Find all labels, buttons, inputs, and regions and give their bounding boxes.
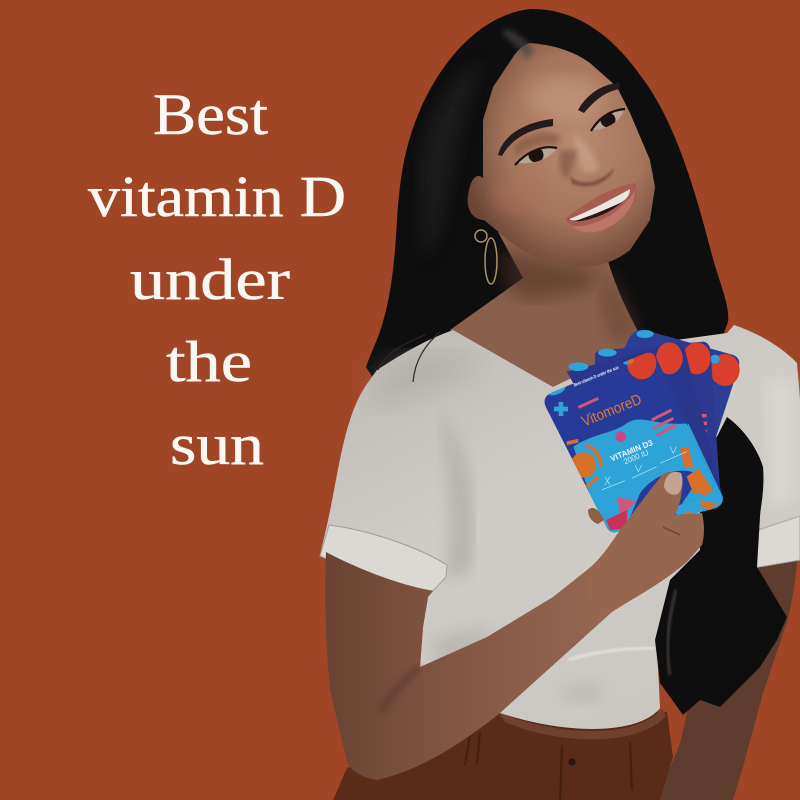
waist skin strip bbox=[498, 708, 666, 739]
hair lock sheen bbox=[668, 590, 676, 675]
heading: Best vitamin D under the sun: under bbox=[130, 247, 290, 312]
long hair lock on the right bbox=[655, 417, 787, 715]
packet tagline: Best vitamin D under the sun bbox=[573, 365, 620, 388]
packet cross icon bbox=[554, 402, 568, 416]
packet red circle bbox=[627, 352, 656, 380]
neck shadow bbox=[500, 250, 600, 300]
neck and chest bbox=[450, 232, 655, 390]
elbow crease shadow bbox=[380, 667, 420, 712]
packet product name: VITAMIN D3 bbox=[609, 437, 654, 464]
back packet 4 bbox=[613, 330, 740, 453]
back packet 2 bbox=[567, 342, 723, 521]
right sleeve highlight bbox=[765, 380, 797, 510]
left arm bbox=[325, 552, 640, 780]
cheek blush bbox=[492, 177, 544, 213]
hair parting highlight bbox=[503, 28, 533, 60]
photo: woman holding vitamin D packets bbox=[320, 9, 800, 800]
trouser belt loops bbox=[465, 732, 632, 800]
nose bbox=[559, 135, 614, 187]
hair strands over shoulder bbox=[378, 332, 440, 382]
holding hand bbox=[587, 472, 704, 612]
heading: Best vitamin D under the sun: Best bbox=[153, 82, 268, 147]
packet light-blue label area bbox=[573, 420, 720, 537]
back packet 3 bbox=[595, 342, 721, 517]
packet blue cloud bbox=[548, 386, 566, 396]
hoop earring bbox=[475, 230, 497, 284]
hair behind the head bbox=[366, 9, 728, 400]
right eyebrow bbox=[578, 83, 620, 113]
neck right shadow bbox=[600, 270, 640, 345]
heading: Best vitamin D under the sun bbox=[88, 82, 346, 477]
vitamin D3 packets bbox=[545, 330, 740, 537]
trouser button bbox=[568, 758, 576, 766]
waist fold bbox=[568, 648, 655, 660]
heading: Best vitamin D under the sun: sun bbox=[170, 412, 264, 477]
left eye bbox=[515, 133, 560, 165]
heading: Best vitamin D under the sun: the bbox=[166, 329, 252, 394]
left eyebrow bbox=[498, 119, 553, 156]
right eye bbox=[591, 109, 625, 131]
packet orange shapes bbox=[571, 452, 596, 478]
hair sheen left bbox=[420, 60, 480, 260]
right sleeve cuff bbox=[752, 516, 800, 568]
front packet bbox=[545, 347, 720, 537]
shoulder shading bbox=[370, 354, 480, 410]
small finger behind packets bbox=[588, 508, 604, 524]
forehead highlight bbox=[527, 76, 603, 120]
right arm bbox=[657, 560, 797, 800]
packet feature icons bbox=[602, 447, 687, 490]
smiling mouth bbox=[565, 183, 636, 232]
shirt lower shading bbox=[430, 625, 600, 700]
sleeve inner shadow bbox=[440, 410, 473, 580]
packet brand name: VitomoreD bbox=[579, 391, 644, 430]
white shirt body bbox=[320, 325, 800, 729]
packet pink shapes bbox=[578, 398, 676, 436]
heading: Best vitamin D under the sun: vitamin D bbox=[88, 164, 346, 229]
face bbox=[468, 43, 655, 267]
packet dose: 2000 IU bbox=[622, 448, 650, 466]
trousers bbox=[333, 708, 673, 800]
left sleeve cuff bbox=[320, 525, 447, 591]
packet lower shapes bbox=[630, 470, 693, 516]
